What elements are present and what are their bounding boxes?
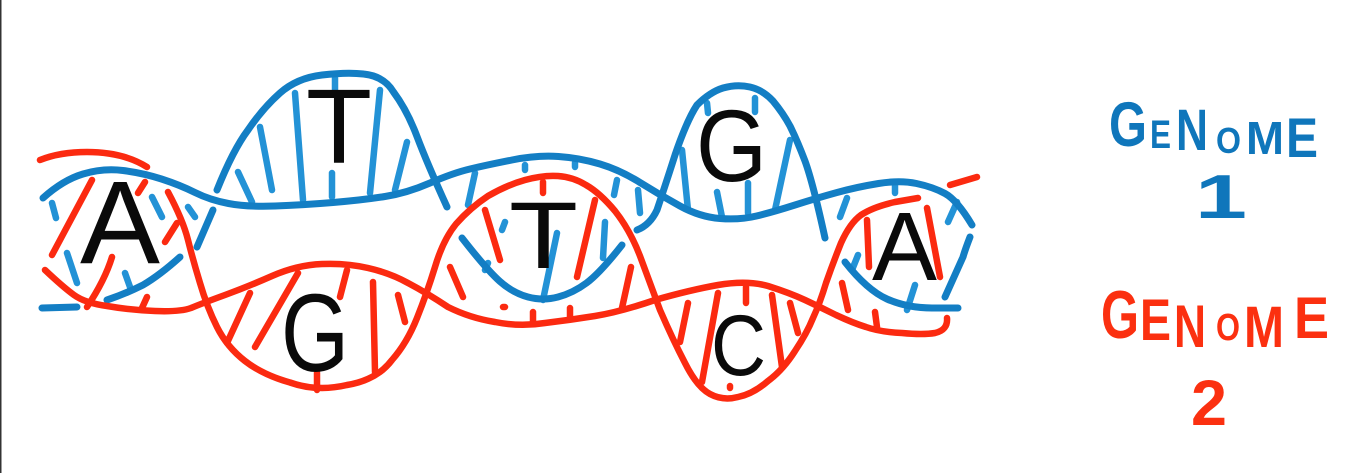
letter A left: A <box>80 157 160 289</box>
legend: genome 2: N <box>1174 293 1206 360</box>
letter T top: T <box>306 68 372 186</box>
legend: genome 2: E <box>1294 286 1329 351</box>
genome 1 blue strand <box>42 73 972 308</box>
genome 1 blue rungs <box>52 78 957 310</box>
legend: genome 1 <box>1109 90 1318 232</box>
letter C bottom: C <box>711 298 766 394</box>
letter G bottom: G <box>281 272 349 395</box>
genome 2 red strand and rungs <box>40 152 977 398</box>
legend: genome 2: 2 <box>1191 367 1227 439</box>
legend: genome 1: O <box>1216 120 1241 161</box>
legend: genome 2: O <box>1216 307 1240 349</box>
letter G top: G <box>696 89 767 203</box>
legend: genome 2: E <box>1140 288 1171 353</box>
legend: genome 1: N <box>1176 98 1208 163</box>
legend: genome 1: G <box>1109 90 1147 160</box>
base letters <box>80 68 937 395</box>
letter T middle: T <box>509 183 578 289</box>
legend: genome 1: 1 <box>1195 163 1247 232</box>
legend: genome 2 <box>1101 277 1329 439</box>
legend: genome 1: E <box>1286 106 1318 169</box>
legend: genome 1: E <box>1150 113 1171 157</box>
legend: genome 1: M <box>1246 112 1284 164</box>
letter A right: A <box>872 192 937 301</box>
legend: genome 2: M <box>1244 295 1284 360</box>
legend: genome 2: G <box>1101 277 1139 353</box>
